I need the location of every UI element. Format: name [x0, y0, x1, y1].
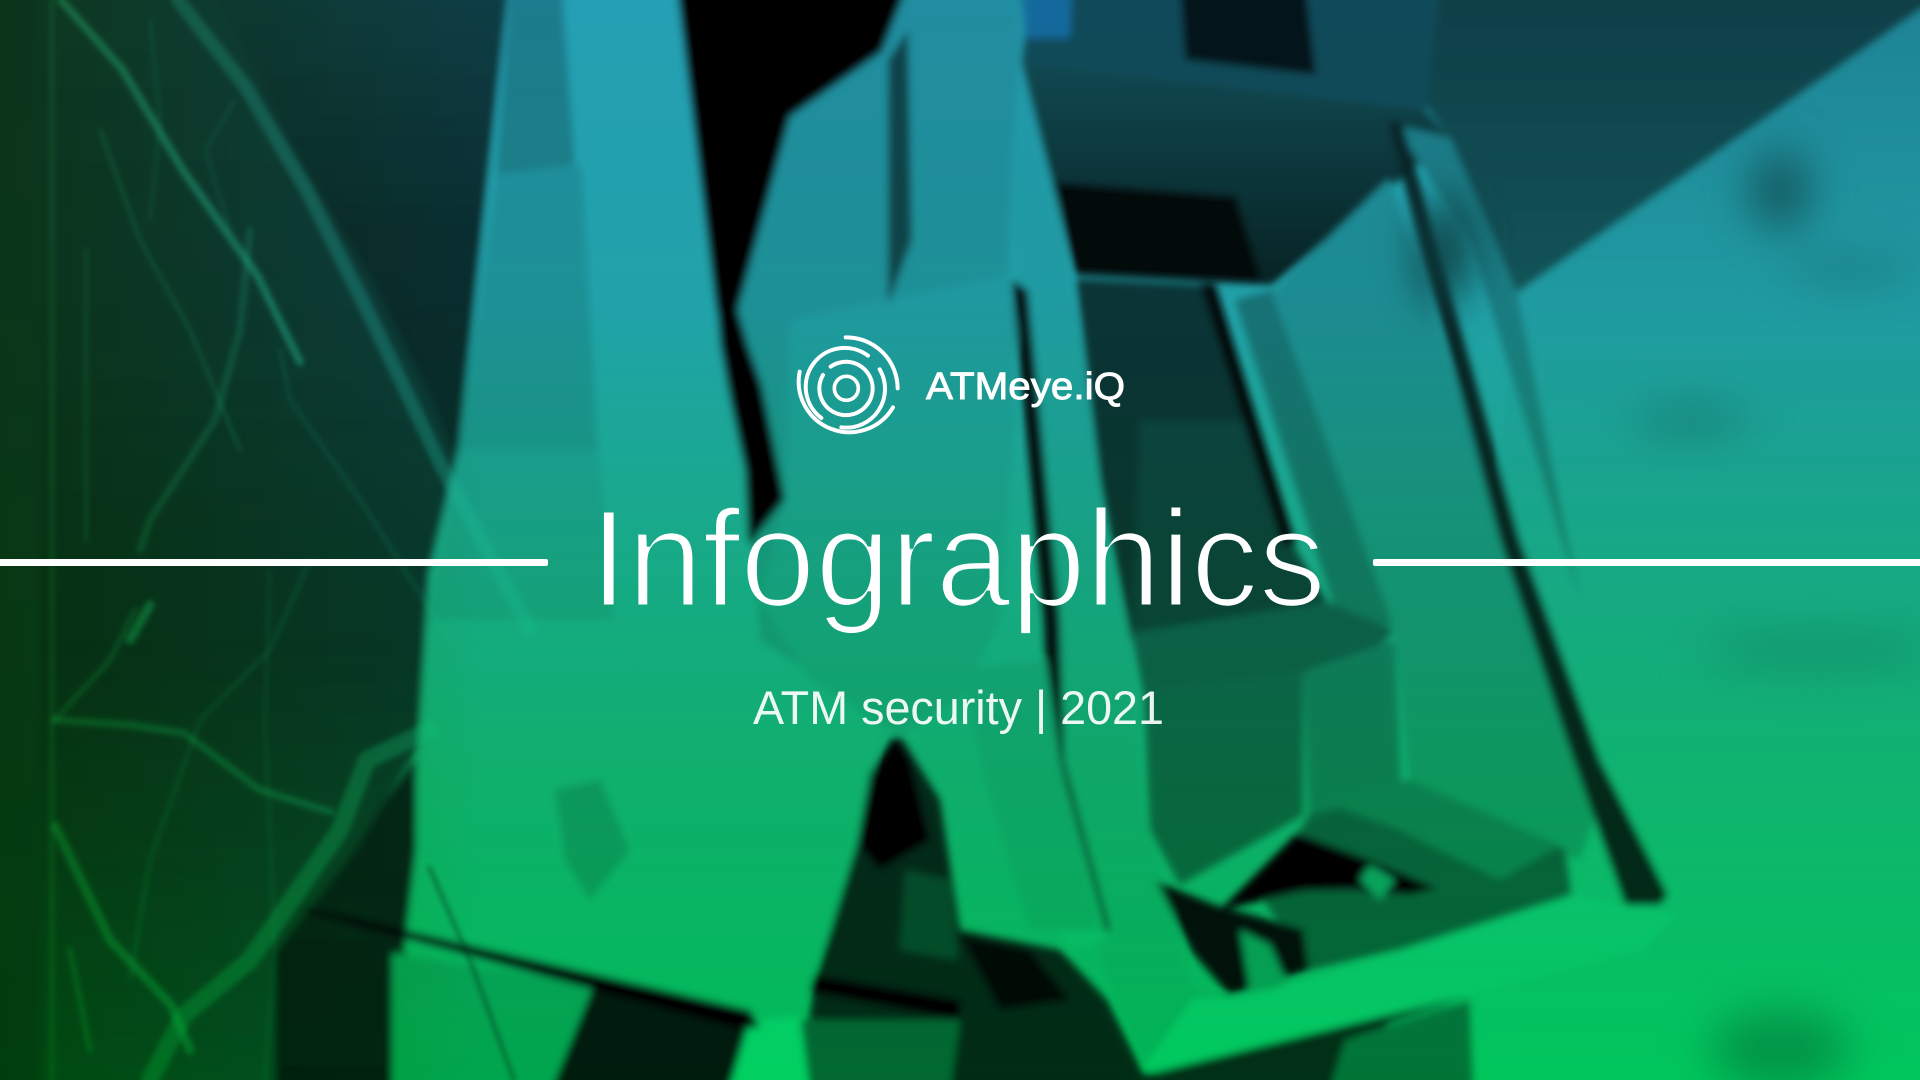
diagonal black bar — [300, 908, 760, 1028]
tray hole — [1220, 833, 1437, 910]
shelf underside — [1021, 62, 1450, 285]
dark recess behind glass — [200, 0, 530, 1080]
right rule — [1373, 559, 1920, 566]
black gap — [677, 0, 906, 310]
panel legs bottom — [392, 953, 594, 1080]
interior dark — [1052, 182, 1262, 282]
dark upper wall — [1400, 0, 1920, 293]
pale panel left — [404, 0, 880, 1019]
subtitle: ATM security | 2021 — [753, 681, 1164, 734]
bright spot bottom — [729, 1015, 810, 1080]
glass cracks — [52, 0, 530, 1080]
title: Infographics — [590, 482, 1326, 636]
left rule — [0, 559, 548, 566]
dark guts bottom — [1070, 995, 1468, 1080]
brand name: ATMeye.iQ — [926, 366, 1125, 408]
guts hole — [1156, 881, 1309, 995]
left strip — [0, 0, 52, 1080]
soft patches on right wall — [1420, 150, 1920, 1080]
keypad strip — [1235, 290, 1395, 625]
black line at monitor left — [1012, 280, 1110, 935]
band under monitor — [1131, 602, 1395, 695]
black line at monitor right — [1200, 284, 1296, 545]
dark screen top — [1180, 0, 1316, 75]
blue spot — [1021, 0, 1072, 38]
long black strut — [1388, 122, 1668, 905]
upper housing — [1021, 0, 1440, 110]
left guts — [800, 735, 1144, 1080]
monitor — [1076, 279, 1327, 640]
dark triangle bottom — [551, 984, 750, 1080]
cylinder — [1144, 672, 1303, 885]
right light wall — [1440, 0, 1920, 1080]
second pale panel — [738, 0, 1021, 735]
tray — [1260, 788, 1572, 970]
glass panel — [40, 0, 530, 1080]
bright lower frame — [1144, 895, 1676, 1072]
frame strip — [1012, 0, 1240, 1070]
dark stripe on panel — [888, 30, 912, 305]
side panel — [1272, 179, 1600, 860]
icon: ATMeye concentric logo — [799, 337, 898, 432]
